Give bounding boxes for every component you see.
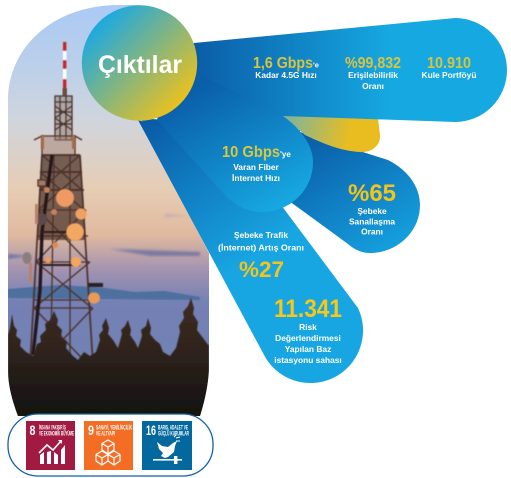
icon: dove and gavel	[153, 435, 182, 464]
text: traffic growth	[218, 230, 304, 282]
conifer tree line	[8, 298, 209, 418]
text: availability: %99,832	[345, 55, 401, 72]
photo: telecom tower at sunset	[0, 0, 215, 420]
text: risk assessment: Değerlendirmesi	[275, 333, 341, 343]
title circle	[82, 5, 197, 121]
text: 4.5G speed: 'e	[313, 60, 319, 70]
panel: SDG badges	[8, 414, 213, 476]
petal: network virtualization: Sanallaşma	[349, 216, 395, 226]
SDG 16 badge: BARIŞ, ADALET VE	[158, 426, 188, 432]
text: 4.5G speed: Kadar 4.5G Hızı	[255, 70, 317, 80]
petal: 4.5G speed, availability, tower portfolio	[140, 18, 507, 122]
SDG 9 badge: 9	[88, 422, 94, 438]
SDG 8 badge: İNSANA YAKIŞIR İŞ	[39, 424, 66, 432]
text: availability	[345, 55, 401, 91]
icon: stacked cubes	[96, 440, 120, 465]
SDG 9 badge	[84, 421, 133, 470]
petal: network virtualization	[150, 120, 420, 253]
title circle: Çıktılar	[98, 51, 182, 79]
SDG 16 badge: GÜÇLÜ KURUMLAR	[158, 430, 189, 438]
tower dishes	[22, 135, 103, 304]
petal: network traffic and risk assessment	[138, 120, 363, 383]
SDG 8 badge	[26, 421, 75, 470]
petal: network virtualization: %65	[348, 180, 396, 207]
text: tower portfolio: Kule Portföyü	[422, 70, 476, 80]
text: risk assessment: Risk	[299, 322, 317, 332]
petal: fiber internet speed	[157, 60, 313, 212]
dark base of petal fan	[138, 118, 300, 200]
SDG 16 badge	[142, 421, 192, 470]
icon: growth chart	[39, 440, 65, 464]
text: risk assessment: Yapılan Baz	[285, 344, 331, 354]
tower lattice	[29, 94, 94, 358]
text: tower portfolio	[422, 55, 476, 80]
text: risk assessment: 11.341	[274, 295, 342, 323]
text: availability: Erişilebilirlik	[348, 70, 398, 80]
petal: fiber internet speed: Varan Fiber	[233, 162, 280, 172]
SDG 8 badge: VE EKONOMİK BÜYÜME	[39, 430, 74, 438]
SDG 16 badge: 16	[146, 422, 156, 438]
SDG 9 badge: SANAYİ, YENİLİKÇİLİK	[96, 424, 132, 432]
text: traffic growth: (İnternet) Artış Oranı	[218, 242, 304, 252]
text: 4.5G speed	[253, 55, 319, 80]
text: 4.5G speed: 1,6 Gbps	[253, 55, 313, 72]
petal: fiber internet speed: 10 Gbps	[222, 144, 280, 161]
clouds and distant mountain	[8, 214, 200, 300]
petal: yellow accent	[280, 114, 380, 152]
petal: network virtualization: Oranı	[361, 226, 383, 236]
SDG 8 badge: 8	[30, 422, 36, 438]
petal: fiber internet speed: İnternet Hızı	[232, 173, 280, 183]
text: availability: Oranı	[362, 81, 384, 91]
petal: fiber internet speed: 'ye	[280, 150, 291, 159]
text: traffic growth: Şebeke Trafik	[234, 230, 288, 240]
text: traffic growth: %27	[239, 257, 284, 282]
petal: network virtualization: Şebeke	[357, 206, 387, 216]
tower mast	[62, 42, 67, 96]
text: risk assessment	[274, 295, 342, 365]
text: risk assessment: istasyonu sahası	[274, 355, 342, 365]
text: tower portfolio: 10.910	[427, 55, 471, 72]
SDG 9 badge: VE ALTYAPI	[96, 432, 115, 438]
